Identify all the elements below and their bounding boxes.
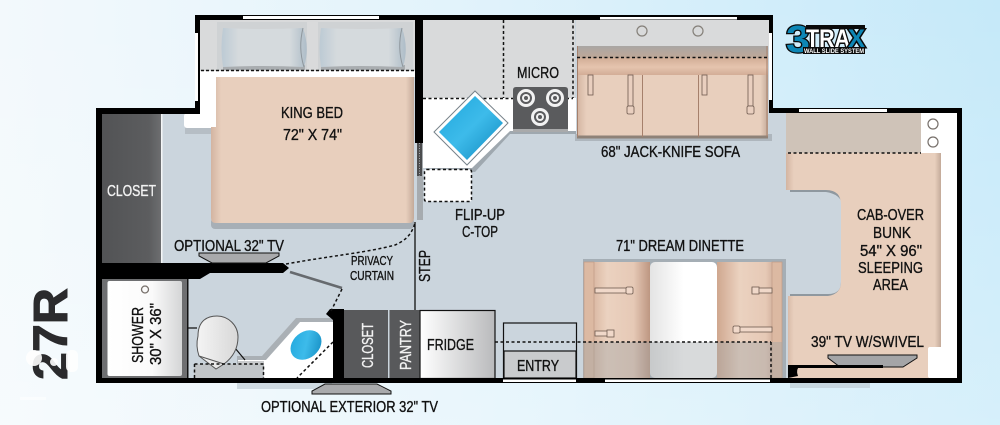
label: model number: 27R xyxy=(25,288,78,380)
walls xyxy=(96,15,962,383)
seat belts xyxy=(588,75,754,114)
label: pantry: PANTRY xyxy=(398,320,415,370)
label: cab-over bunk: AREA xyxy=(873,277,908,294)
flip-up countertop xyxy=(424,170,472,202)
label: optional tv: OPTIONAL 32" TV xyxy=(174,238,284,255)
label: fridge: FRIDGE xyxy=(427,337,474,354)
panel: dream dinette xyxy=(583,238,786,378)
seat belts xyxy=(595,287,772,337)
label: optional exterior tv: OPTIONAL EXTERIOR 32" TV xyxy=(261,399,438,416)
panel: shower xyxy=(101,279,188,378)
panel: king bed xyxy=(184,20,415,229)
panel: fridge xyxy=(420,310,495,378)
logo: 3trax wall slide system: WALL SLIDE SYSTEM xyxy=(804,49,864,55)
watermark xyxy=(20,350,78,400)
icon: sink xyxy=(434,91,508,165)
privacy curtain dotted line xyxy=(286,223,415,264)
floor xyxy=(101,20,957,378)
label: bed size: 72" X 74" xyxy=(283,127,342,144)
step line xyxy=(414,222,416,310)
label: closet: CLOSET xyxy=(107,183,156,200)
icon: left pillow xyxy=(217,22,307,70)
panel: cab-over bunk xyxy=(786,113,957,378)
entry step dotted line xyxy=(495,341,771,343)
logo: 3trax wall slide system: TRA xyxy=(806,25,850,53)
icon: optional 32 inch tv xyxy=(199,253,279,263)
label: cab-over bunk: 54" X 96" xyxy=(860,243,922,260)
label: privacy curtain: CURTAIN xyxy=(350,268,394,283)
label: closet: CLOSET xyxy=(360,323,377,368)
label: privacy curtain: PRIVACY xyxy=(351,253,393,268)
label: tv swivel: 39" TV W/SWIVEL xyxy=(811,334,924,351)
panel: bath closet xyxy=(344,310,388,378)
logo: 3trax wall slide system xyxy=(786,19,865,61)
panel: pantry xyxy=(390,310,420,378)
label: sofa: 68" JACK-KNIFE SOFA xyxy=(601,144,740,161)
label: flip-up c-top: C-TOP xyxy=(462,224,498,241)
label: flip-up c-top xyxy=(455,207,505,241)
icon: exterior tv xyxy=(312,384,391,394)
label: micro: MICRO xyxy=(517,65,559,82)
label: shower: SHOWER xyxy=(130,307,147,363)
icon: right pillow xyxy=(318,22,413,70)
label: entry: ENTRY xyxy=(517,358,559,375)
icon: bathroom sink xyxy=(285,324,327,366)
bathroom door xyxy=(290,272,342,311)
label: step: STEP xyxy=(417,250,434,282)
label: cab-over bunk: BUNK xyxy=(873,225,911,242)
label: flip-up c-top: FLIP-UP xyxy=(455,207,505,224)
icon: swivel tv xyxy=(788,355,917,378)
label: shower size: 30" X 36" xyxy=(148,303,165,365)
label: dinette: 71" DREAM DINETTE xyxy=(616,238,744,255)
icon: toilet xyxy=(188,316,264,378)
label: cab-over bunk xyxy=(857,207,924,294)
panel: bath vanity xyxy=(237,318,333,378)
panel: jack-knife sofa xyxy=(575,20,772,161)
label: privacy curtain xyxy=(350,253,394,283)
panel: left closet xyxy=(101,113,162,264)
panel: galley counter xyxy=(423,20,576,172)
logo: 3trax wall slide system: 3 xyxy=(786,19,810,61)
panel: entry xyxy=(504,323,576,378)
windows xyxy=(195,16,887,382)
slide-out rail xyxy=(417,143,423,220)
logo: 3trax wall slide system: X xyxy=(848,25,865,53)
label: cab-over bunk: SLEEPING xyxy=(858,260,923,277)
label: cab-over bunk: CAB-OVER xyxy=(857,207,924,224)
icon: stove xyxy=(513,87,568,132)
label: king bed: KING BED xyxy=(281,105,343,122)
